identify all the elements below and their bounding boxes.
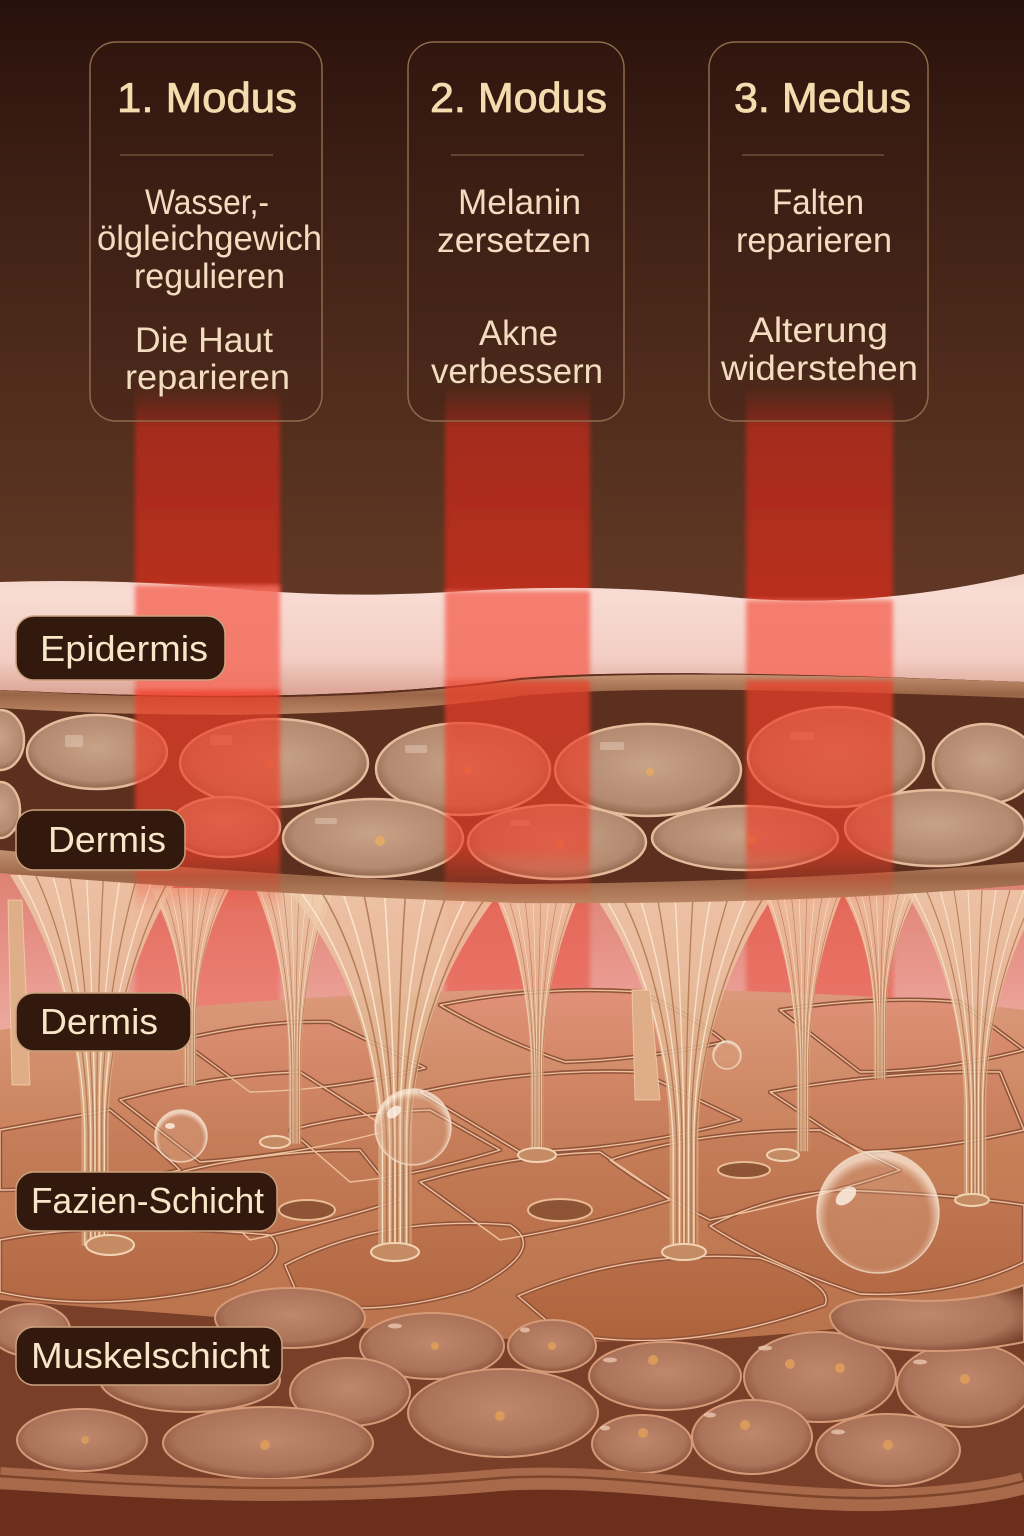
holes in plates xyxy=(279,1162,770,1221)
label: Muskelschicht: Muskelschicht xyxy=(31,1335,270,1376)
text: mode 2 benefits: verbessern xyxy=(431,352,603,391)
lower tissue base xyxy=(0,988,1024,1536)
label: Epidermis xyxy=(16,616,225,680)
heading: mode 1: 1. Modus xyxy=(117,74,297,121)
text: mode 1 benefits: Die Haut xyxy=(135,321,273,360)
label: Epidermis: Epidermis xyxy=(40,628,208,669)
panel: mode 3 xyxy=(709,42,928,421)
text: mode 2 benefits xyxy=(431,183,603,391)
text: mode 3 benefits: Alterung xyxy=(749,311,888,350)
muscle layer xyxy=(0,1285,1024,1536)
label: Fazien-Schicht: Fazien-Schicht xyxy=(31,1180,264,1221)
red light passing through tissue xyxy=(135,680,893,910)
text: mode 2 benefits: Melanin xyxy=(458,183,581,222)
red light beams xyxy=(135,385,893,625)
label: Dermis upper xyxy=(16,810,185,870)
text: mode 1 benefits xyxy=(97,183,322,397)
dermis glow xyxy=(0,860,1024,1050)
label: Dermis upper: Dermis xyxy=(48,819,166,860)
fibers xyxy=(8,875,1024,1255)
panel: mode 1 xyxy=(90,42,322,421)
text: mode 2 benefits: Akne xyxy=(479,314,558,353)
heading: mode 3: 3. Medus xyxy=(734,74,911,121)
text: mode 3 benefits: widerstehen xyxy=(720,349,918,388)
heading: mode 2: 2. Modus xyxy=(430,74,607,121)
label: Dermis lower: Dermis xyxy=(40,1001,158,1042)
bubbles xyxy=(155,1041,939,1273)
panel: mode 2 xyxy=(408,42,624,421)
text: mode 1 benefits: regulieren xyxy=(134,257,285,296)
lower membrane xyxy=(0,850,1024,903)
label: Muskelschicht xyxy=(16,1327,282,1385)
bottom membrane xyxy=(0,1476,1024,1536)
text: mode 3 benefits xyxy=(720,183,918,388)
background xyxy=(0,0,1024,640)
dermis cell band xyxy=(0,673,1024,910)
upper membrane xyxy=(0,675,1024,715)
fiber bases xyxy=(86,1136,989,1261)
text: mode 2 benefits: zersetzen xyxy=(437,221,591,260)
label: Dermis lower xyxy=(16,993,191,1051)
text: mode 3 benefits: Falten xyxy=(772,183,864,222)
label: Fazien-Schicht xyxy=(16,1172,277,1231)
text: mode 1 benefits: ölgleichgewich xyxy=(97,219,322,258)
fascia plates xyxy=(0,990,1024,1341)
text: mode 1 benefits: Wasser,- xyxy=(145,183,269,222)
epidermis layer xyxy=(0,574,1024,702)
text: mode 3 benefits: reparieren xyxy=(736,221,892,260)
text: mode 1 benefits: reparieren xyxy=(125,358,290,397)
